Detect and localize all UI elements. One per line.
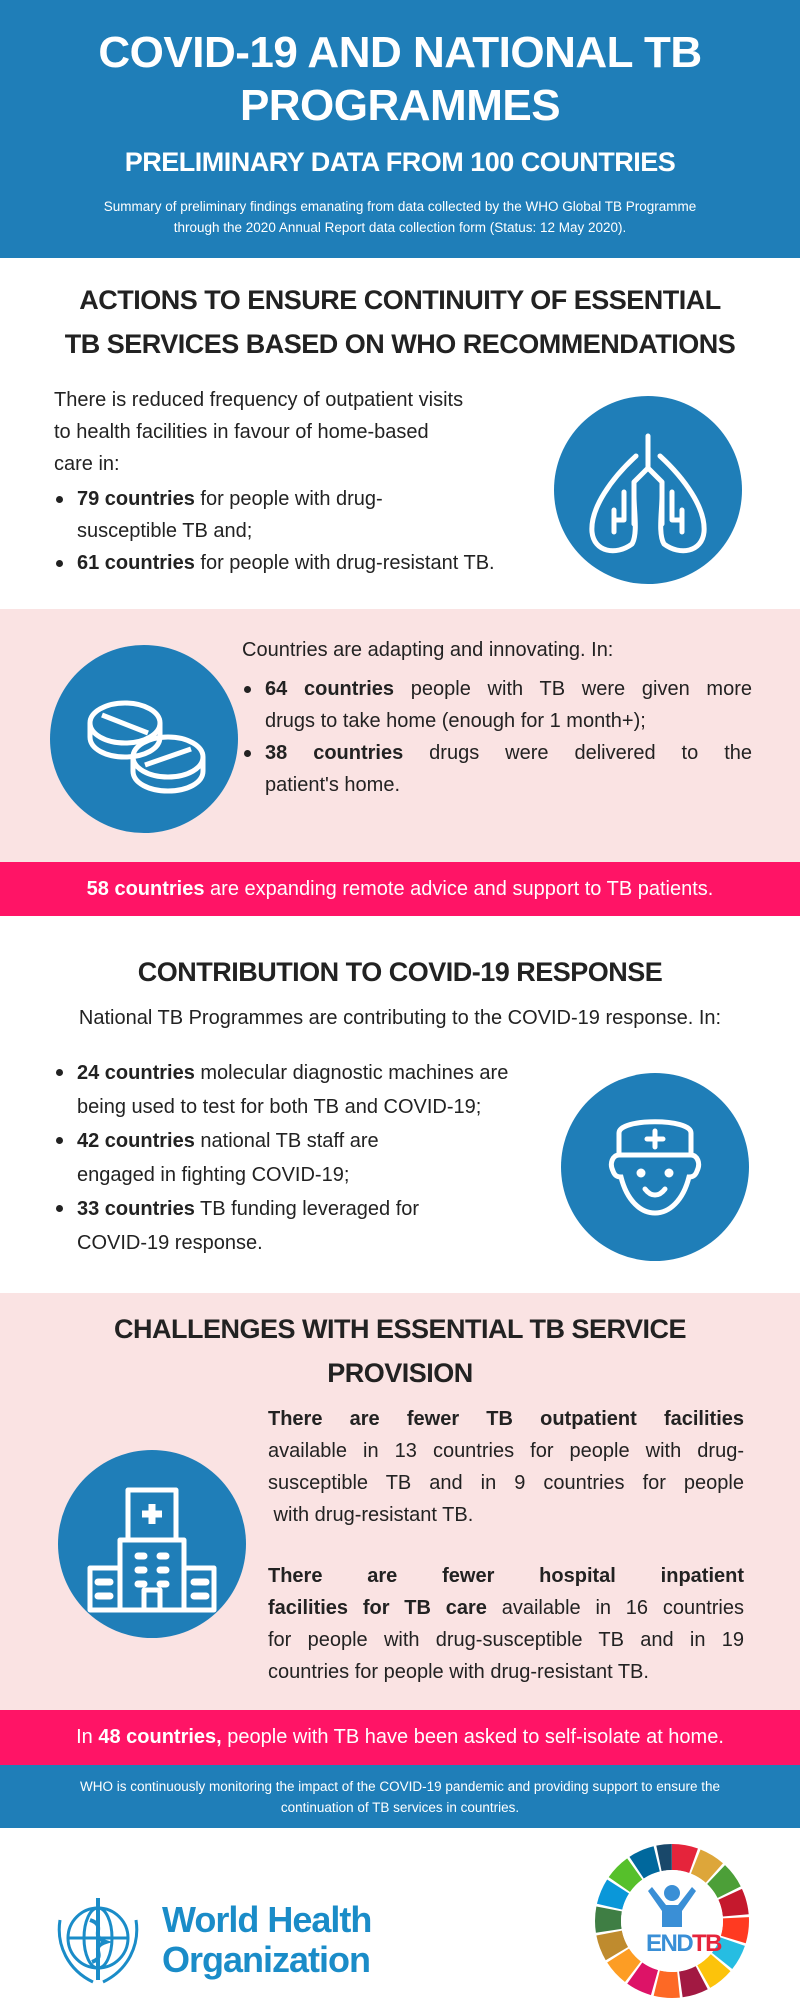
text block: contribution intro: National TB Programmes are contributing to the COVID-19 response. In: (79, 1007, 721, 1029)
text block: reduced outpatient visits: care in: (54, 453, 120, 475)
title: COVID-19 AND NATIONAL TB (98, 28, 702, 77)
text block: reduced outpatient visits (54, 389, 495, 574)
callout: remote advice (0, 862, 800, 916)
text block: adapting: 38 countries drugs were delivered to the (265, 742, 752, 764)
text block: outpatient facilities: available in 13 countries for people with drug- (268, 1440, 744, 1462)
header note (104, 199, 696, 235)
text block: reduced outpatient visits: There is reduced frequency of outpatient visits (54, 389, 463, 411)
panel: challenges (0, 1293, 800, 1710)
section heading: challenges: PROVISION (327, 1358, 473, 1388)
logo: END TB (595, 1844, 749, 1998)
text block: adapting: 64 countries people with TB were given more (265, 678, 752, 700)
section heading: actions: ACTIONS TO ENSURE CONTINUITY OF ESSENTIAL (79, 285, 721, 315)
text block: contribution bullets (56, 1062, 508, 1254)
text block: contribution bullets: 42 countries national TB staff are (77, 1130, 379, 1152)
callout: self-isolate (0, 1710, 800, 1765)
section heading: contribution: CONTRIBUTION TO COVID-19 RESPONSE (138, 957, 662, 987)
text block: inpatient facilities: for people with drug-susceptible TB and in 19 (268, 1629, 744, 1651)
logo: World Health Organization (58, 1898, 371, 1984)
text block: reduced outpatient visits: susceptible TB and; (77, 520, 252, 542)
icon: hospital (58, 1450, 246, 1638)
icon: pills (50, 645, 238, 833)
header note: Summary of preliminary findings emanating from data collected by the WHO Global TB Programme (104, 199, 696, 214)
header note: through the 2020 Annual Report data collection form (Status: 12 May 2020). (174, 220, 626, 235)
text block: outpatient facilities (268, 1408, 744, 1526)
callout: self-isolate: In 48 countries, people with TB have been asked to self-isolate at home. (76, 1726, 724, 1748)
text block: reduced outpatient visits: to health facilities in favour of home-based (54, 421, 429, 443)
text block: inpatient facilities: countries for people with drug-resistant TB. (268, 1661, 649, 1683)
text block: outpatient facilities: with drug-resistant TB. (274, 1504, 473, 1526)
footer note (0, 1765, 800, 1828)
logo: END TB: TB (692, 1930, 722, 1957)
text block: adapting: Countries are adapting and innovating. In: (242, 639, 613, 661)
text block: contribution bullets: being used to test for both TB and COVID-19; (77, 1096, 481, 1118)
text block: adapting (242, 639, 752, 796)
section heading: actions: TB SERVICES BASED ON WHO RECOMMENDATIONS (65, 329, 735, 359)
footer note: continuation of TB services in countries. (281, 1800, 519, 1815)
title (98, 28, 702, 130)
panel: adapting and innovating (0, 609, 800, 862)
footer note: WHO is continuously monitoring the impact of the COVID-19 pandemic and providing support to ensure the (80, 1779, 720, 1794)
section heading: challenges: CHALLENGES WITH ESSENTIAL TB SERVICE (114, 1314, 686, 1344)
icon: health worker face (561, 1073, 749, 1261)
logo: World Health Organization: Organization (162, 1939, 370, 1980)
logo: World Health Organization: World Health (162, 1899, 371, 1940)
text block: contribution bullets: COVID-19 response. (77, 1232, 263, 1254)
text block: adapting: patient's home. (265, 774, 400, 796)
section heading: actions (65, 285, 735, 359)
text block: contribution bullets: 24 countries molecular diagnostic machines are (77, 1062, 508, 1084)
text block: reduced outpatient visits: 79 countries for people with drug- (77, 488, 383, 510)
subtitle: PRELIMINARY DATA FROM 100 COUNTRIES (125, 147, 675, 177)
title: PROGRAMMES (240, 81, 560, 130)
section heading: challenges (114, 1314, 686, 1388)
text block: adapting: drugs to take home (enough for 1 month+); (265, 710, 646, 732)
text block: reduced outpatient visits: 61 countries for people with drug-resistant TB. (77, 552, 495, 574)
header panel (0, 0, 800, 258)
text block: contribution bullets: 33 countries TB funding leveraged for (77, 1198, 419, 1220)
callout: remote advice: 58 countries are expanding remote advice and support to TB patients. (87, 878, 713, 900)
text block: contribution bullets: engaged in fighting COVID-19; (77, 1164, 349, 1186)
text block: inpatient facilities: facilities for TB care available in 16 countries (268, 1597, 744, 1619)
icon: lungs (554, 396, 742, 584)
text block: outpatient facilities: susceptible TB and in 9 countries for people (268, 1472, 744, 1494)
text block: outpatient facilities: There are fewer TB outpatient facilities (268, 1408, 744, 1430)
text block: inpatient facilities: There are fewer hospital inpatient (268, 1565, 744, 1587)
text block: inpatient facilities (268, 1565, 744, 1683)
logo: END TB: END (646, 1930, 693, 1957)
